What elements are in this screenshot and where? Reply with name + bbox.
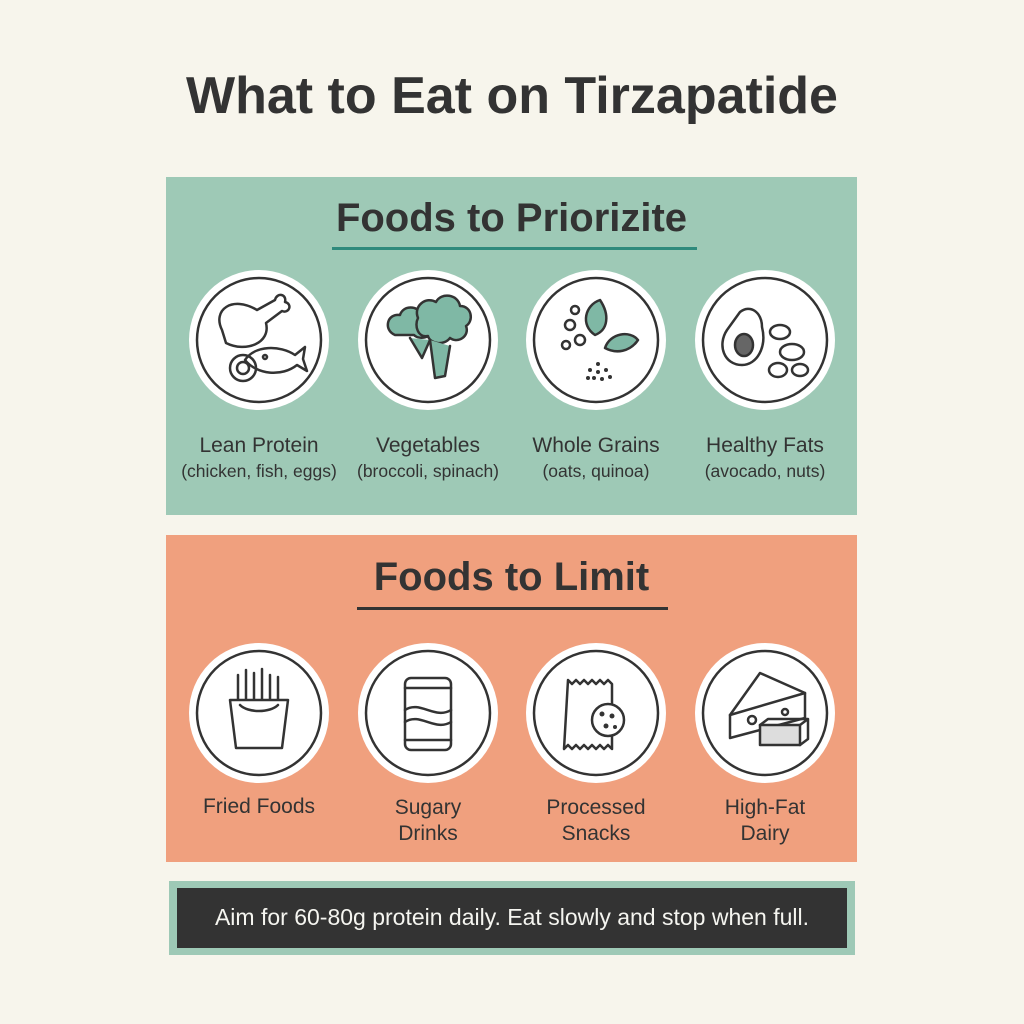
labels <box>203 795 806 845</box>
labels: (avocado, nuts) <box>705 461 825 481</box>
icon: lean protein <box>189 270 329 410</box>
labels: Whole Grains <box>532 434 660 457</box>
callout: protein tip <box>169 881 855 955</box>
callout: protein tip: Aim for 60-80g protein daily. Eat slowly and stop when full. <box>215 904 809 930</box>
labels: High-Fat <box>725 796 805 819</box>
heading: foods to limit: Foods to Limit <box>374 555 649 599</box>
labels: Drinks <box>398 822 458 845</box>
labels: Healthy Fats <box>706 434 824 457</box>
labels: Vegetables <box>376 434 480 457</box>
labels: (oats, quinoa) <box>542 461 650 481</box>
labels: (chicken, fish, eggs) <box>181 461 337 481</box>
heading: foods to priorizite: Foods to Priorizite <box>336 196 687 240</box>
icon: high-fat dairy <box>695 643 835 783</box>
icon: whole grains <box>526 270 666 410</box>
labels: Lean Protein <box>199 434 319 457</box>
icon: sugary drinks <box>358 643 498 783</box>
panel: foods to limit <box>166 535 857 862</box>
labels: Dairy <box>740 822 790 845</box>
icon: healthy fats <box>695 270 835 410</box>
underline <box>332 247 697 250</box>
icon: vegetables <box>358 270 498 410</box>
panel: foods to prioritize <box>166 177 857 515</box>
labels: (broccoli, spinach) <box>357 461 499 481</box>
icon: fried foods <box>189 643 329 783</box>
labels: Sugary <box>395 796 461 819</box>
icon: processed snacks <box>526 643 666 783</box>
labels <box>181 434 825 481</box>
labels: Snacks <box>562 822 630 845</box>
labels: Processed <box>546 796 646 819</box>
underline <box>357 607 668 610</box>
title: What to Eat on Tirzapatide <box>186 67 838 125</box>
labels: Fried Foods <box>203 795 315 818</box>
